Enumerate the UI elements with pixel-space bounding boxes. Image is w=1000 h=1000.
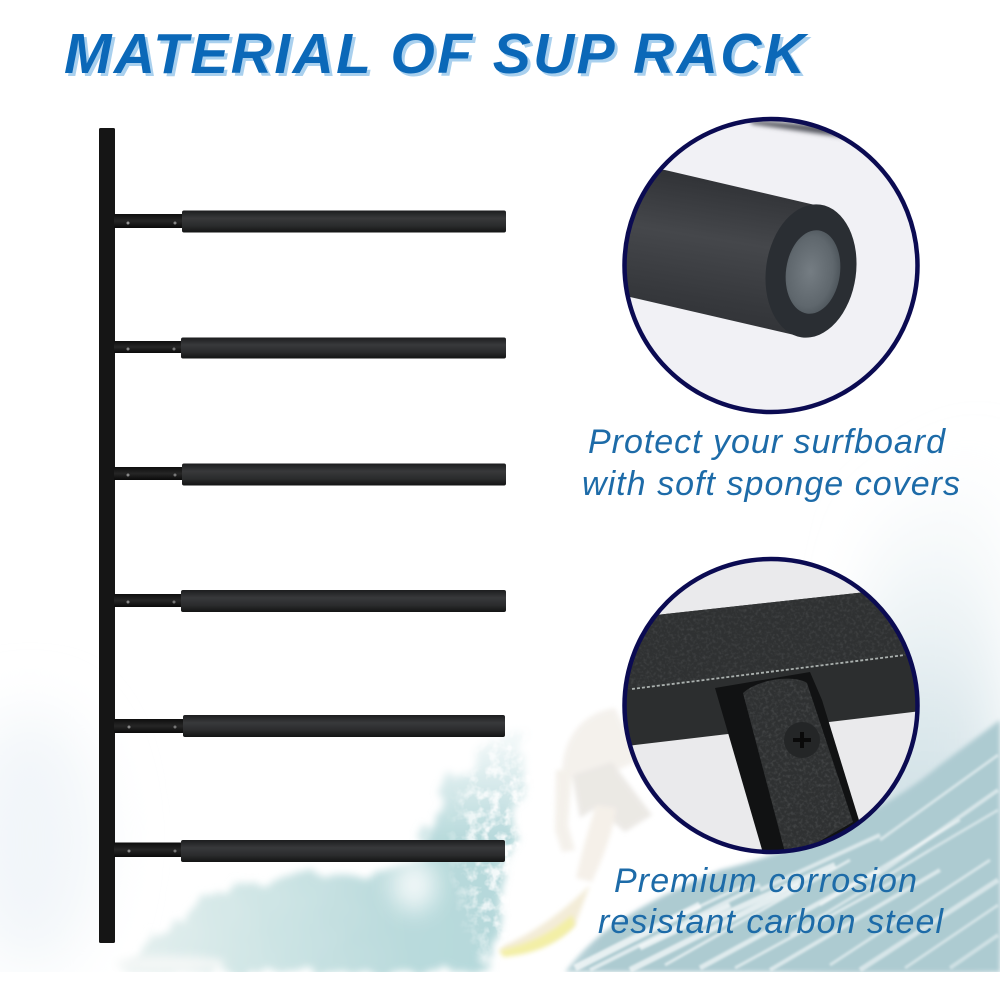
caption: sponge covers: with soft sponge covers [582,465,960,503]
rack arm 1 [114,210,506,232]
rack arm 2 [114,338,506,358]
background: surfer on ocean wave [0,540,1000,972]
rack upright bar [99,128,115,943]
rack arm 3 [114,464,506,486]
detail circle: welded carbon steel joint [610,559,930,860]
surfboard [498,885,590,957]
title: MATERIAL OF SUP RACK [64,22,809,86]
caption: carbon steel: resistant carbon steel [598,903,944,941]
caption: carbon steel [598,862,944,941]
caption: sponge covers [582,423,960,503]
detail circle: sponge cover end [600,119,918,412]
caption: sponge covers: Protect your surfboard [588,423,946,461]
caption: carbon steel: Premium corrosion [614,862,917,900]
product: wall-mounted rack [99,128,506,943]
surfer [555,708,652,882]
rack arm 5 [114,715,505,737]
rack arm 6 [114,840,505,862]
rack arm 4 [114,590,506,612]
